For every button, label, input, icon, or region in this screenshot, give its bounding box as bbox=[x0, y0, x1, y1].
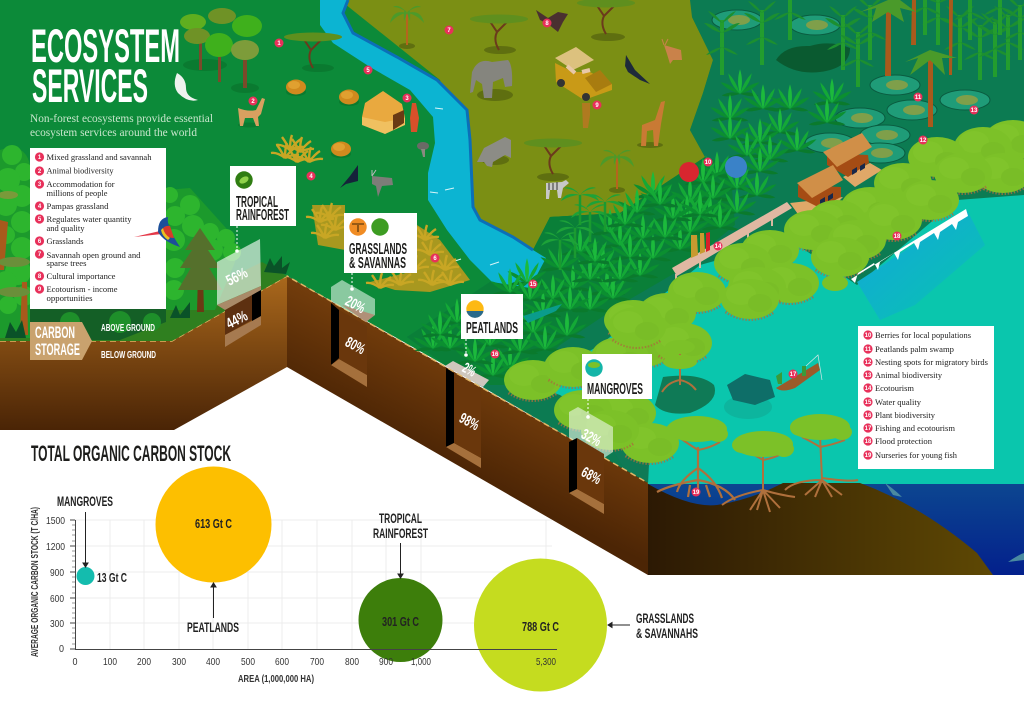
carbon storage label bbox=[30, 322, 156, 361]
panel: services list 10-19: Water quality bbox=[875, 397, 922, 407]
panel: services list 1-9: 7 bbox=[38, 252, 42, 258]
x axis labels: 400 bbox=[206, 656, 220, 668]
title: SERVICES bbox=[32, 59, 148, 112]
savanna: palms bbox=[390, 6, 634, 193]
icon: rhino bbox=[477, 137, 511, 167]
panel: services list 1-9: Accommodation for bbox=[46, 179, 115, 189]
icon: elephant bbox=[470, 60, 513, 101]
panel: services list 1-9: 4 bbox=[38, 204, 42, 210]
label: grasslands and savannas: GRASSLANDS bbox=[349, 241, 407, 258]
label: tropical rainforest: TROPICAL bbox=[236, 194, 278, 211]
x axis labels: 600 bbox=[275, 656, 289, 668]
icon: macaw bbox=[134, 217, 180, 247]
series names: MANGROVES bbox=[57, 494, 113, 509]
panel: services list 1-9: Animal biodiversity bbox=[46, 166, 114, 176]
fishing canoe bbox=[776, 355, 822, 390]
number markers on the map: 7 bbox=[447, 28, 451, 34]
bubble: mangroves bbox=[76, 567, 94, 585]
leader lines bbox=[235, 226, 590, 419]
bubble chart bbox=[29, 466, 698, 692]
number markers on the map: 9 bbox=[595, 103, 599, 109]
subtitle bbox=[30, 111, 214, 139]
y axis labels bbox=[46, 515, 65, 655]
label: mangroves bbox=[582, 354, 652, 399]
x axis labels: 300 bbox=[172, 656, 186, 668]
x axis labels: 700 bbox=[310, 656, 324, 668]
carbon storage label: ABOVE GROUND bbox=[101, 322, 155, 334]
y axis labels: 300 bbox=[50, 618, 64, 630]
pointer arrows bbox=[83, 512, 630, 628]
panel: services list 10-19: Animal biodiversity bbox=[875, 370, 943, 380]
number markers on the map: 10 bbox=[705, 160, 712, 166]
column: tropical rainforest: 44% bbox=[223, 307, 251, 333]
column: mangroves bbox=[569, 407, 613, 514]
mangrove canopy belt bbox=[504, 120, 1024, 463]
peat ferns bbox=[414, 69, 852, 378]
bubble values bbox=[97, 516, 559, 634]
bamboo stems bbox=[704, 0, 1024, 87]
panel: services list 1-9: 6 bbox=[38, 239, 42, 245]
grass tufts bbox=[306, 203, 464, 288]
column: mangroves: 32% bbox=[578, 426, 604, 450]
panel: services list 1-9: Mixed grassland and savannah bbox=[46, 152, 152, 162]
subtitle: ecosystem services around the world bbox=[30, 125, 197, 139]
peat: dark canopy bbox=[776, 43, 850, 72]
large mangroves with roots bbox=[657, 414, 858, 512]
forest: dark shrubs base bbox=[30, 309, 166, 340]
panel: services list 10-19: 11 bbox=[865, 347, 872, 353]
hut and villager bbox=[362, 91, 419, 134]
panel: services list 10-19 bbox=[858, 326, 994, 469]
icon: rider on horse bbox=[536, 10, 568, 32]
x axis labels: 200 bbox=[137, 656, 151, 668]
river bbox=[320, 0, 546, 288]
region: savanna ground bbox=[340, 0, 713, 250]
icon: ostrich bbox=[417, 142, 429, 157]
number markers on the map: 14 bbox=[715, 244, 722, 250]
number markers on the map bbox=[248, 18, 978, 496]
icon: raven bbox=[625, 55, 650, 84]
tree: acacia near marker 1 bbox=[284, 32, 342, 72]
carbon storage label: CARBON bbox=[35, 323, 75, 342]
number markers on the map: 8 bbox=[545, 21, 549, 27]
background: grassland green ground bbox=[0, 0, 1024, 480]
wave bbox=[851, 209, 968, 283]
number markers on the map: 6 bbox=[433, 256, 437, 262]
column: tropical rainforest bbox=[217, 239, 261, 347]
swamp ponds bbox=[712, 10, 990, 163]
panel: services list 10-19: Nesting spots for migratory birds bbox=[875, 357, 989, 367]
panel: services list 1-9 bbox=[30, 148, 166, 309]
number markers on the map: 13 bbox=[971, 108, 978, 114]
x axis labels: 800 bbox=[345, 656, 359, 668]
number markers on the map: 4 bbox=[309, 174, 313, 180]
forest: left tree mass bbox=[0, 145, 34, 338]
trees: top-left grove bbox=[180, 8, 262, 93]
label: grasslands and savannas: & SAVANNAS bbox=[349, 255, 406, 272]
number markers on the map: 18 bbox=[894, 234, 901, 240]
panel: services list 1-9: Pampas grassland bbox=[46, 201, 109, 211]
column: mangroves: 68% bbox=[578, 464, 604, 488]
water: turquoise sea bbox=[530, 195, 1024, 484]
series names: TROPICAL bbox=[379, 511, 422, 526]
x axis labels: 0 bbox=[72, 656, 78, 668]
label: peatlands: PEATLANDS bbox=[466, 320, 518, 337]
y axis title: AVERAGE ORGANIC CARBON STOCK (T C/HA) bbox=[29, 507, 41, 657]
axes bbox=[70, 520, 557, 650]
bushes bbox=[286, 80, 359, 158]
title bbox=[31, 19, 180, 112]
number markers on the map: 11 bbox=[915, 95, 922, 101]
panel: services list 10-19: 13 bbox=[865, 373, 872, 379]
panel: services list 1-9: 1 bbox=[38, 155, 42, 161]
icon: giraffe bbox=[637, 101, 665, 148]
region: peatland swamp ground bbox=[407, 0, 1024, 490]
ground surface dashed line bbox=[0, 276, 648, 483]
y axis labels: 1500 bbox=[46, 515, 65, 527]
label: tropical rainforest: RAINFOREST bbox=[236, 207, 289, 224]
carbon storage label: STORAGE bbox=[35, 340, 80, 359]
x axis labels: 100 bbox=[103, 656, 117, 668]
x axis labels: 1,000 bbox=[411, 656, 431, 668]
number markers on the map: 17 bbox=[790, 372, 797, 378]
panel: services list 10-19: 17 bbox=[865, 426, 872, 432]
number markers on the map: 12 bbox=[920, 138, 927, 144]
number markers on the map: 16 bbox=[492, 352, 499, 358]
icon: ranger bbox=[582, 103, 590, 128]
column: tropical rainforest: 56% bbox=[223, 264, 251, 290]
bubble: grasslands and savannahs bbox=[474, 558, 607, 692]
bubble values: 788 Gt C bbox=[522, 619, 559, 634]
icon: guanaco bbox=[238, 98, 265, 128]
savanna: acacia trees bbox=[470, 0, 635, 181]
eco-tourists bbox=[691, 232, 710, 258]
panel: services list 10-19: Fishing and ecotourism bbox=[875, 423, 955, 433]
number markers on the map: 3 bbox=[405, 96, 409, 102]
series names: GRASSLANDS bbox=[636, 611, 694, 626]
y axis labels: 900 bbox=[50, 567, 64, 579]
carbon storage label: BELOW GROUND bbox=[101, 349, 156, 361]
column: grasslands and savannas bbox=[331, 280, 375, 387]
region: peat fern ground bbox=[407, 157, 735, 385]
panel: services list 10-19: Plant biodiversity bbox=[875, 410, 936, 420]
icon: white bird bbox=[175, 73, 198, 101]
small mangrove tree bbox=[662, 340, 697, 392]
panel: services list 10-19: 16 bbox=[865, 413, 872, 419]
column: grasslands and savannas: 20% bbox=[342, 293, 368, 317]
icon: antelope bbox=[372, 170, 393, 197]
panel: services list 10-19: Nurseries for young fish bbox=[875, 450, 958, 460]
column: grasslands and savannas: 80% bbox=[342, 334, 368, 358]
y axis labels: 0 bbox=[59, 643, 64, 655]
grass: golden savanna grassland bbox=[312, 205, 470, 292]
boardwalk bbox=[672, 202, 792, 282]
column: peatlands: 98% bbox=[456, 410, 482, 434]
bubble values: 613 Gt C bbox=[195, 516, 232, 531]
panel: services list 1-9: 9 bbox=[38, 287, 42, 293]
label: mangroves: MANGROVES bbox=[587, 381, 643, 398]
panel: services list 1-9: Grasslands bbox=[46, 236, 84, 246]
panel: services list 1-9: opportunities bbox=[46, 293, 93, 303]
bubble: peatlands bbox=[156, 466, 272, 582]
y axis labels: 600 bbox=[50, 593, 64, 605]
title: ECOSYSTEM bbox=[31, 19, 180, 72]
y axis minor ticks bbox=[72, 525, 75, 644]
berry bushes bbox=[679, 156, 747, 182]
x axis labels bbox=[72, 656, 556, 668]
wooden cabins bbox=[790, 133, 882, 217]
bubble values: 13 Gt C bbox=[97, 570, 127, 585]
panel: services list 1-9: 2 bbox=[38, 169, 42, 175]
number markers on the map: 1 bbox=[277, 41, 281, 47]
panel: services list 10-19: Flood protection bbox=[875, 436, 933, 446]
panel: services list 1-9: 5 bbox=[38, 217, 42, 223]
label: peatlands bbox=[461, 294, 523, 339]
coral reef bbox=[724, 374, 775, 419]
label: grasslands and savannas bbox=[344, 213, 417, 273]
panel: services list 10-19: Berries for local populations bbox=[875, 330, 972, 340]
series names: & SAVANNAHS bbox=[636, 626, 698, 641]
panel: services list 10-19: 15 bbox=[865, 400, 872, 406]
panel: services list 10-19: 14 bbox=[865, 386, 872, 392]
panel: services list 1-9: and quality bbox=[46, 223, 85, 233]
icon: deer bbox=[662, 39, 682, 64]
panel: services list 1-9: Savannah open ground and bbox=[46, 250, 141, 260]
panel: services list 1-9: sparse trees bbox=[46, 258, 87, 268]
forest: trees right of the list bbox=[60, 187, 241, 333]
forest: dark shrubs bbox=[5, 256, 290, 338]
x axis labels: 5,300 bbox=[536, 656, 556, 668]
panel: services list 10-19: 10 bbox=[865, 333, 872, 339]
panel: services list 1-9: Cultural importance bbox=[46, 271, 116, 281]
series names: RAINFOREST bbox=[373, 526, 428, 541]
forest: ground strip bbox=[0, 262, 287, 341]
panel: services list 10-19: Ecotourism bbox=[875, 383, 914, 393]
label: tropical rainforest bbox=[230, 166, 296, 226]
x axis title: AREA (1,000,000 HA) bbox=[238, 673, 314, 685]
water: blue shallows by the wave bbox=[857, 210, 985, 320]
peat channels bbox=[523, 304, 562, 323]
subtitle: Non-forest ecosystems provide essential bbox=[30, 111, 214, 125]
icon: safari jeep bbox=[555, 47, 612, 101]
swamp palms bbox=[860, 0, 957, 127]
number markers on the map: 19 bbox=[693, 490, 700, 496]
series names bbox=[57, 494, 698, 641]
number markers on the map: 2 bbox=[251, 99, 255, 105]
forest: conifer tree bbox=[178, 228, 222, 312]
number markers on the map: 15 bbox=[530, 282, 537, 288]
sea cross-section bbox=[648, 484, 1024, 575]
y axis labels: 1200 bbox=[46, 541, 65, 553]
panel: services list 1-9: 3 bbox=[38, 182, 42, 188]
panel: services list 1-9: Regulates water quantity bbox=[46, 214, 132, 224]
column: peatlands bbox=[445, 359, 489, 468]
dark mud patches bbox=[613, 376, 715, 484]
panel: services list 1-9: Ecotourism - income bbox=[46, 284, 118, 294]
panel: services list 1-9: millions of people bbox=[46, 188, 108, 198]
panel: services list 10-19: 12 bbox=[865, 360, 872, 366]
panel: services list 1-9: 8 bbox=[38, 274, 42, 280]
bubble values: 301 Gt C bbox=[382, 614, 419, 629]
panel: services list 10-19: 19 bbox=[865, 453, 872, 459]
soil: left wall bbox=[0, 276, 287, 430]
icon: black bird bbox=[340, 165, 358, 188]
column: peatlands: 2% bbox=[459, 359, 479, 381]
panel: services list 10-19: 18 bbox=[865, 439, 872, 445]
x axis labels: 900 bbox=[379, 656, 393, 668]
bubble: tropical rainforest bbox=[358, 578, 442, 662]
panel: services list 10-19: Peatlands palm swamp bbox=[875, 344, 954, 354]
fish bbox=[885, 483, 1024, 562]
grass: pampas bbox=[271, 135, 323, 162]
icon: zebra bbox=[546, 180, 569, 199]
chart heading: TOTAL ORGANIC CARBON STOCK bbox=[31, 441, 231, 466]
soil: mangrove mound bbox=[648, 483, 993, 575]
series names: PEATLANDS bbox=[187, 620, 239, 635]
x axis labels: 500 bbox=[241, 656, 255, 668]
soil: right wall bbox=[287, 276, 648, 575]
number markers on the map: 5 bbox=[366, 68, 370, 74]
chart grid bbox=[75, 520, 552, 649]
peat palms bbox=[541, 187, 624, 270]
